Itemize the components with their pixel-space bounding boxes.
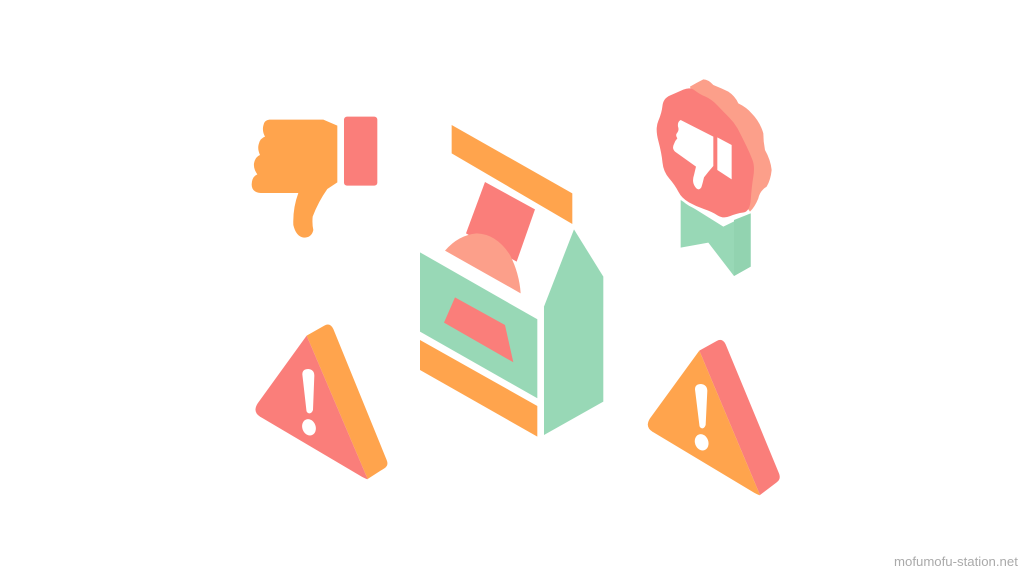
box salmon dome: [445, 233, 521, 293]
box red panel: [466, 182, 535, 262]
exclamation mark right: [693, 384, 711, 452]
triangle left side: [307, 325, 387, 479]
icon: product box: [420, 125, 603, 437]
watermark: mofumofu-station.net: [894, 554, 1018, 569]
box bottom orange band: [420, 340, 537, 437]
exclamation mark left: [300, 369, 318, 437]
badge face: [657, 88, 754, 217]
icon: badge with thumbs down: [657, 79, 772, 276]
icon: warning triangle left: [255, 325, 387, 479]
badge thumb white: [673, 120, 713, 189]
triangle left face: [255, 336, 368, 479]
icon: thumbs down: [252, 117, 377, 238]
triangle right face: [648, 351, 760, 495]
badge cuff white: [717, 137, 732, 179]
badge rim: [690, 79, 772, 212]
thumbs down cuff: [344, 117, 377, 186]
thumbs down hand: [252, 120, 337, 238]
box top orange band: [452, 125, 572, 224]
box side green face: [544, 229, 603, 435]
badge white gap: [657, 92, 754, 221]
box front red label: [444, 297, 513, 362]
badge ribbon fold: [734, 213, 751, 276]
triangle right side: [699, 340, 780, 495]
badge ribbon: [681, 200, 751, 276]
box front green face: [420, 252, 537, 398]
icon: warning triangle right: [648, 340, 780, 495]
